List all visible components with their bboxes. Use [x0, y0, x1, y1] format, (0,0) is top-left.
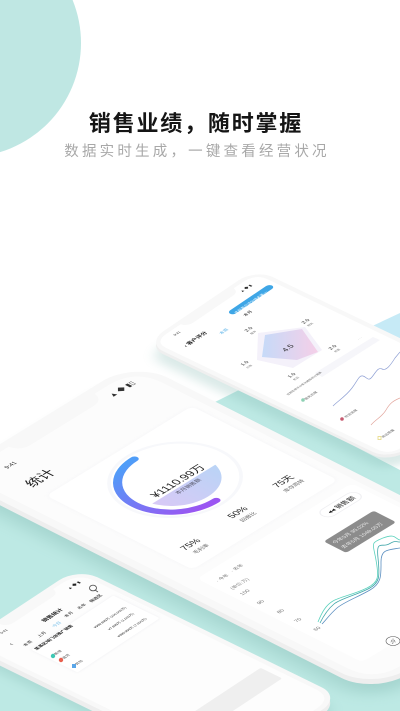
liquid fill: [152, 464, 222, 506]
card heading: 某某区域门店推广销售: [32, 624, 75, 651]
stat 1: [177, 536, 212, 556]
decorative teal circle: [0, 0, 81, 157]
legend: 其他: [73, 659, 84, 666]
chart lines: [318, 536, 400, 624]
phone shadow: [0, 580, 341, 711]
status icons: ▲ ◆ ▮▯: [106, 380, 137, 398]
stat 1: 75%: [177, 536, 204, 552]
light blue backdrop: [374, 313, 400, 338]
progress arc: [113, 456, 220, 515]
radar inner: [262, 329, 318, 360]
data rows: ¥7,999万 (1,000万): [107, 613, 135, 631]
status icons: ▲ ◆ ▮: [238, 284, 253, 293]
legend: 退货: [60, 653, 71, 660]
radar label: 1.0: [286, 372, 298, 379]
legend red: [340, 409, 358, 421]
filter label: 筛选区: [87, 593, 105, 604]
teal backdrop band: [0, 388, 400, 711]
legend: · 去年: [228, 563, 246, 573]
phone side: [0, 500, 400, 684]
tooltip: 今年5月 95.02%: [330, 521, 371, 545]
status bar time: 9:41: [173, 331, 182, 336]
assistant icon: [386, 636, 400, 646]
legend yellow: [378, 428, 396, 440]
phone side: [156, 344, 400, 458]
stat 3: 75天: [269, 473, 297, 489]
tabs: [21, 602, 89, 647]
data rows: [93, 606, 148, 638]
phone shadow: [0, 506, 400, 696]
stat 3: 库存周转: [281, 478, 307, 493]
stat 1: 毛利率: [190, 542, 212, 555]
phone screen group: [0, 568, 341, 711]
phone body: [156, 278, 400, 454]
radar label: 2.0: [327, 344, 339, 351]
radar label: 1.0: [239, 360, 251, 367]
tabs: 今日: [50, 620, 63, 628]
blue trend line: [333, 352, 400, 406]
status time: 9:41: [4, 461, 20, 470]
axis labels: 60: [312, 626, 323, 632]
data card: [31, 595, 160, 672]
axis labels: [227, 577, 334, 633]
phone side: [0, 573, 341, 711]
phone: main statistics: [0, 361, 400, 705]
radar label: [244, 327, 256, 335]
amount label: 本月销售额: [173, 477, 204, 495]
tooltip: 去年5月 1049.05万: [338, 521, 386, 550]
radar label: [288, 373, 300, 380]
radar label: 物流: [305, 322, 314, 327]
subtitle: 数据实时生成，一键查看经营状况: [64, 143, 330, 160]
tab active: 本周: [217, 327, 230, 335]
tab: 本月: [241, 309, 254, 317]
axis labels: 100: [239, 589, 252, 596]
divider panel: [315, 337, 380, 377]
sales pill: ◂◂ 销售额: [324, 495, 358, 515]
grey bottom bar: [177, 668, 282, 711]
axis labels: 70: [293, 617, 304, 623]
red trend line: [371, 398, 400, 425]
legend red: 物流速度: [343, 408, 359, 418]
tooltip: [324, 511, 396, 553]
chart title: 近期各项评分变化趋势统计图表: [284, 371, 323, 396]
chart card: [197, 483, 400, 662]
radar label: [302, 319, 314, 326]
page title: ‹ 客户评分: [181, 330, 210, 348]
tabs: 去年: [75, 602, 89, 610]
radar outer: [257, 327, 322, 368]
legend: · 今年: [214, 573, 231, 583]
legend: [51, 649, 84, 668]
phone screen group: [0, 361, 400, 690]
axis labels: (单位:万): [228, 577, 252, 591]
tabs: 本周: [21, 639, 34, 647]
radar label: 售后: [291, 376, 300, 381]
statistics card: [46, 406, 338, 570]
radar label: [328, 345, 340, 352]
stat 2: 50%: [224, 504, 251, 520]
tabs: 上月: [35, 630, 48, 638]
stat 2: [224, 504, 259, 524]
radar score: 4.5: [279, 343, 296, 353]
status icons: ▲ ◆ ▮: [66, 581, 82, 590]
legend yellow: 商品质量: [380, 428, 396, 438]
screen title: 销售统计: [39, 607, 66, 623]
axis labels: 90: [256, 599, 266, 605]
radar label: 价格: [244, 364, 253, 369]
radar label: [240, 361, 252, 368]
data rows: ¥999,999万 (100,000万): [93, 606, 127, 629]
assistant icon: 小: [390, 638, 396, 645]
legend green: [301, 391, 318, 402]
data rows: ¥999,999万 (7,000万): [116, 617, 148, 638]
sales pill: [316, 490, 365, 519]
more dots: ···: [356, 336, 364, 341]
pill text: 本月客户评分排名第一: [233, 290, 269, 314]
radar label: 2.0: [300, 318, 312, 325]
radar label: 2.0: [243, 326, 255, 333]
title: 销售业绩，随时掌握: [89, 111, 303, 136]
axis labels: 80: [276, 609, 286, 615]
phone shadow: [152, 348, 400, 468]
phone: top right customer score: [152, 284, 400, 468]
stat 2: 回报比: [238, 510, 259, 523]
phone: bottom left sales statistics: [0, 568, 341, 711]
icon: search: [90, 585, 98, 592]
radar label: 服务: [248, 330, 257, 335]
legend: [213, 563, 247, 583]
stat 3: [269, 472, 307, 493]
page heading: 统计: [21, 467, 59, 489]
legend: 新增: [52, 649, 63, 656]
radar label: 质量: [332, 348, 341, 353]
legend green: 服务态度: [303, 390, 319, 400]
amount: ¥1110.99万: [148, 464, 209, 500]
tabs: 本月: [62, 610, 75, 618]
back arrow: ‹: [8, 642, 16, 646]
